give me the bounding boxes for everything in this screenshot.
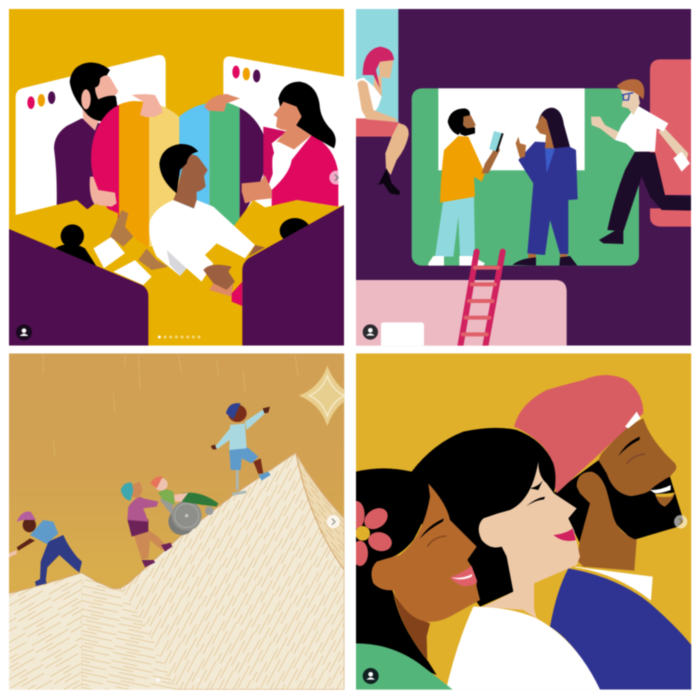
left hill (9, 573, 177, 690)
carousel dots (158, 335, 200, 338)
bearded man (54, 63, 118, 209)
ladder (460, 252, 503, 348)
woman in navy suit (512, 108, 578, 266)
person pushing wheelchair (121, 482, 172, 567)
navy jacket and white collar (550, 567, 691, 690)
person in wheelchair (150, 476, 218, 535)
centre woman (412, 428, 580, 618)
woman with flower: hair (356, 468, 437, 675)
bearded man's hands (90, 94, 163, 207)
woman in pink cardigan (204, 82, 338, 208)
running man (591, 79, 691, 244)
lead climber in blue (9, 511, 82, 586)
flower (349, 501, 394, 566)
right browser window (223, 56, 344, 208)
next arrow (328, 170, 340, 186)
panel: office team and ladder (356, 9, 691, 349)
left browser window (16, 55, 166, 215)
centre man in white (149, 144, 265, 306)
rainbow heart (90, 100, 264, 248)
green room (412, 88, 639, 266)
avatar badge (363, 324, 378, 340)
climber with pointing arm and prosthetic leg (211, 403, 271, 494)
sitting woman (356, 47, 409, 195)
pink lower panel (356, 280, 567, 346)
green top (356, 643, 453, 690)
purple foreground desks (9, 205, 344, 346)
carousel dots (156, 678, 199, 682)
shaking arms at bottom left (93, 210, 168, 285)
avatar badge (16, 324, 32, 340)
remote attendee silhouettes (55, 218, 310, 267)
coral panels (650, 59, 691, 227)
next arrow (674, 515, 687, 528)
white blouse (446, 607, 600, 690)
guiding star (299, 366, 345, 426)
yellow desks (16, 199, 344, 226)
panel: three smiling profiles (349, 353, 691, 690)
man with phone (428, 108, 503, 266)
woman with flower: face (371, 483, 480, 660)
man in pink turban (514, 375, 683, 571)
sky streaks (43, 355, 298, 457)
white box (381, 322, 424, 349)
panel: climbing the mountain (9, 353, 354, 690)
panel: rainbow heart team (9, 9, 344, 346)
main mountain (120, 453, 344, 690)
white screen (438, 88, 585, 170)
next arrow (327, 515, 340, 528)
cyan window (356, 9, 398, 124)
avatar badge (363, 668, 379, 684)
right mountain facet (296, 453, 344, 570)
